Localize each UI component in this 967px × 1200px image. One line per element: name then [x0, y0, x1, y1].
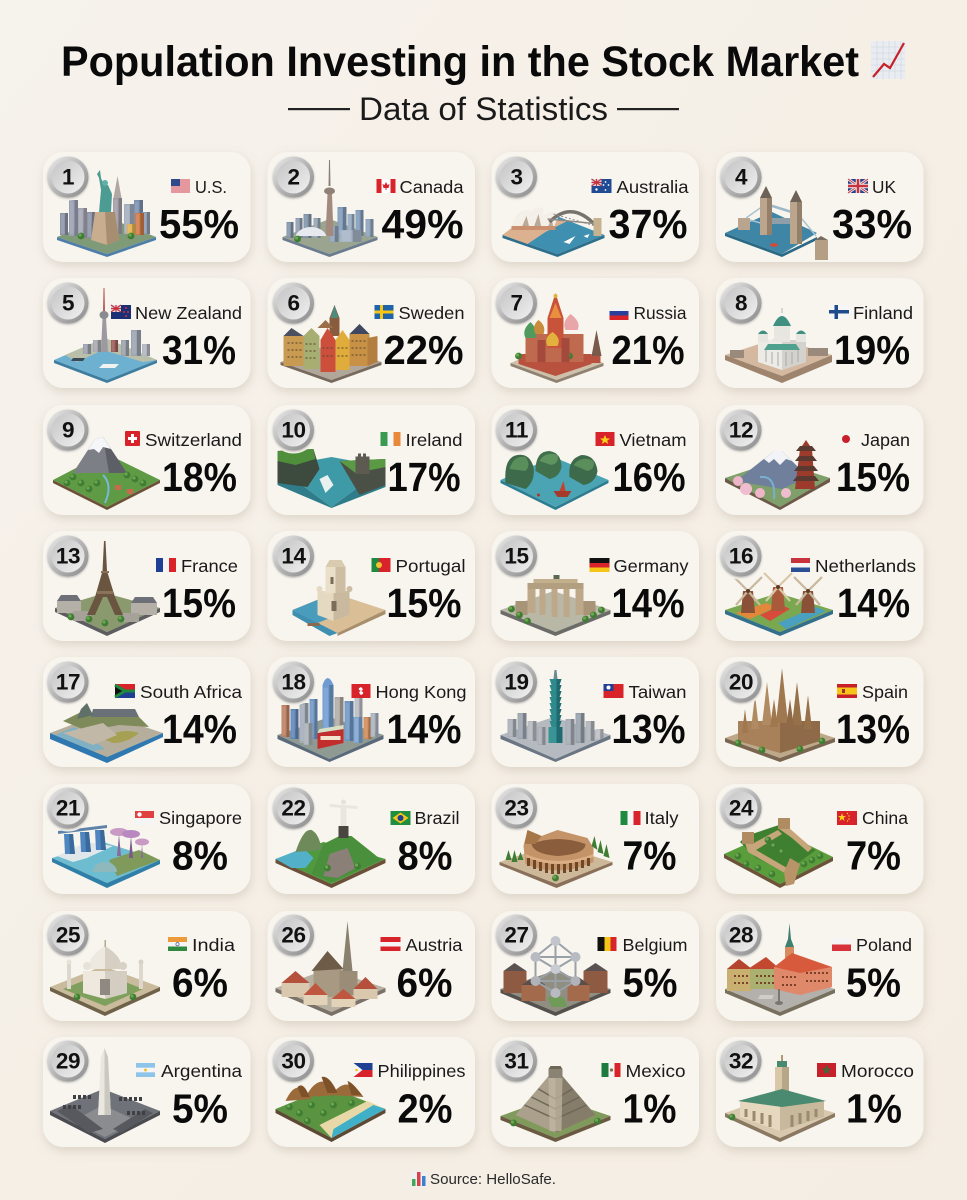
rank badge: 18 [281, 670, 306, 694]
country name: Canada [400, 177, 464, 197]
rank badge: 22 [281, 796, 306, 820]
rank badge [718, 532, 764, 580]
illustration: Hong Kong skyline [278, 678, 384, 762]
card 6: Sweden [268, 278, 475, 388]
rank badge: 17 [56, 670, 80, 694]
card 21: Singapore [43, 784, 250, 894]
illustration: Tower Bridge [725, 186, 828, 260]
percentage: 14% [612, 580, 684, 626]
rank badge: 6 [287, 290, 300, 316]
rank badge: 30 [281, 1048, 306, 1074]
flag: New Zealand [111, 305, 131, 319]
rank badge [718, 154, 764, 200]
flag: Finland [829, 305, 849, 319]
card 3: Australia [492, 152, 699, 262]
card 19: Taiwan [492, 657, 699, 767]
rank badge: 32 [729, 1048, 753, 1074]
percentage: 15% [386, 580, 462, 626]
illustration: Sagrada Familia [725, 668, 835, 762]
country name: Belgium [622, 935, 688, 955]
card 1: U.S. [43, 152, 250, 262]
card 20: Spain [716, 657, 924, 767]
rank badge: 5 [62, 290, 74, 316]
country name: Russia [634, 303, 687, 323]
illustration: Statue of Liberty and skyline [57, 170, 156, 257]
percentage: 21% [612, 327, 684, 373]
flag: Poland [832, 938, 851, 951]
flag: France [156, 558, 176, 572]
flag: Argentina [136, 1063, 155, 1077]
flag: Brazil [390, 811, 410, 825]
rank badge: 4 [735, 164, 748, 190]
country name: Hong Kong [376, 682, 466, 702]
rank badge [44, 406, 92, 454]
card 15: Germany [492, 531, 699, 641]
illustration: Eiffel Tower [55, 541, 160, 636]
percentage: 16% [612, 454, 686, 500]
illustration: Windmills and tulip fields [725, 573, 833, 636]
card 16: Netherlands [716, 531, 924, 641]
country name: Portugal [396, 556, 466, 576]
flag: Taiwan [604, 684, 624, 698]
flag: Mexico [602, 1063, 620, 1077]
card 28: Poland [716, 911, 924, 1021]
rank badge [493, 658, 540, 706]
percentage: 15% [836, 454, 910, 500]
rank badge [718, 280, 764, 326]
flag: U.S. [171, 179, 190, 193]
rank badge: 27 [504, 922, 529, 948]
country name: Australia [616, 177, 689, 197]
country name: New Zealand [135, 303, 242, 323]
rank badge [718, 912, 764, 958]
percentage: 7% [622, 832, 676, 878]
rank badge [270, 280, 317, 326]
rank badge: 21 [56, 796, 80, 820]
flag: Germany [590, 558, 610, 572]
flag: Australia [592, 179, 612, 193]
card 27: Belgium [492, 911, 699, 1021]
rank badge [493, 406, 540, 454]
country name: Netherlands [815, 556, 916, 576]
illustration: Stockholm Gamla Stan buildings [280, 305, 382, 383]
illustration: Obelisco [50, 1048, 160, 1143]
rank badge [270, 912, 317, 958]
card 12: Japan [716, 405, 924, 515]
rank badge: 24 [729, 796, 754, 820]
rank badge [270, 784, 317, 832]
rank badge: 9 [62, 418, 74, 442]
rank badge [493, 532, 540, 580]
rank badge [718, 658, 764, 706]
flag: Switzerland [125, 431, 140, 446]
flag: China [837, 811, 857, 825]
illustration: Marina Bay Sands and Supertrees [52, 825, 160, 888]
rank badge [270, 532, 317, 580]
rank badge: 7 [510, 290, 523, 316]
card 2: Canada [268, 152, 475, 262]
country name: France [181, 556, 238, 576]
country name: Mexico [626, 1061, 686, 1081]
card 22: Brazil [268, 784, 475, 894]
card 8: Finland [716, 278, 924, 388]
flag: Belgium [598, 937, 616, 951]
percentage: 19% [834, 327, 910, 373]
flag: Canada [376, 179, 396, 193]
rank badge: 10 [281, 418, 306, 442]
illustration: Mount Fuji and pagoda [725, 440, 830, 510]
illustration: Sydney Opera House and bridge [502, 207, 604, 257]
rank badge [44, 1038, 92, 1084]
rank badge [718, 784, 764, 832]
country name: Finland [853, 303, 913, 323]
card 5: New Zealand [43, 278, 250, 388]
percentage: 15% [162, 580, 236, 626]
flag: Sweden [374, 305, 394, 319]
country name: Austria [406, 935, 463, 955]
percentage: 7% [846, 832, 901, 878]
source note: Source: HelloSafe. [430, 1171, 556, 1188]
rank badge: 29 [56, 1048, 80, 1074]
card 30: Philippines [268, 1037, 475, 1147]
country name: Italy [644, 808, 679, 828]
card 18: Hong Kong [268, 657, 475, 767]
illustration: CN Tower and skyline [282, 160, 378, 257]
illustration: Cliffs of Moher [278, 449, 386, 508]
flag: Vietnam [596, 432, 614, 446]
percentage: 5% [172, 1086, 228, 1132]
rank badge: 31 [504, 1048, 529, 1074]
flag: Austria [380, 937, 400, 951]
illustration: Great Wall [724, 818, 833, 888]
percentage: 14% [386, 706, 462, 752]
rank badge [493, 912, 540, 958]
title: Population Investing in the Stock Market [61, 38, 859, 86]
rank badge [44, 784, 92, 832]
rank badge: 26 [281, 922, 306, 948]
rank badge [493, 784, 540, 832]
card 31: Mexico [492, 1037, 699, 1147]
country name: Morocco [841, 1061, 914, 1081]
illustration: Belem Tower [292, 560, 386, 636]
flag: Philippines [354, 1063, 372, 1077]
country name: UK [872, 177, 896, 197]
rank badge: 13 [56, 544, 80, 568]
flag: Ireland [380, 432, 400, 446]
illustration: Hassan II Mosque [725, 1055, 835, 1142]
illustration: Saint Basil's Cathedral [510, 293, 604, 383]
illustration: Chichen Itza pyramid [500, 1066, 610, 1142]
flag: India [168, 937, 187, 951]
card 17: South Africa [43, 657, 250, 767]
rank badge: 15 [504, 544, 529, 568]
flag: South Africa [115, 684, 135, 698]
percentage: 31% [162, 327, 236, 373]
flag: Morocco [817, 1063, 836, 1077]
illustration: Taj Mahal [50, 940, 160, 1016]
rank badge: 8 [735, 290, 747, 316]
flag: UK [848, 179, 868, 193]
rank badge: 2 [287, 164, 300, 190]
illustration: Matterhorn [53, 437, 160, 510]
country name: Germany [614, 556, 689, 576]
subtitle with rules: Data of Statistics [359, 91, 608, 127]
percentage: 1% [846, 1086, 902, 1132]
percentage: 2% [398, 1086, 452, 1132]
illustration: Ha Long Bay [500, 451, 608, 510]
rank badge: 25 [56, 922, 80, 948]
rank badge: 3 [510, 164, 523, 190]
illustration: St. Stephen's Cathedral [276, 921, 386, 1016]
rank badge [270, 406, 317, 454]
percentage: 5% [846, 960, 901, 1006]
rank badge [718, 406, 764, 454]
flag: Italy [620, 811, 640, 825]
country name: U.S. [195, 177, 227, 197]
country name: Singapore [159, 808, 242, 828]
card 14: Portugal [268, 531, 475, 641]
rank badge [493, 280, 540, 326]
rank badge: 14 [281, 544, 306, 568]
percentage: 22% [384, 327, 464, 373]
card 7: Russia [492, 278, 699, 388]
percentage: 6% [396, 960, 452, 1006]
illustration: Table Mountain [50, 703, 163, 763]
card 10: Ireland [268, 405, 475, 515]
illustration: Warsaw Old Town [725, 923, 835, 1016]
flag: Netherlands [791, 558, 810, 572]
percentage: 5% [622, 960, 678, 1006]
rank badge [270, 1038, 317, 1084]
rank badge [44, 280, 92, 326]
percentage: 14% [837, 580, 910, 626]
country name: Argentina [161, 1061, 242, 1081]
illustration: Brandenburg Gate [500, 575, 610, 636]
country name: Spain [862, 682, 908, 702]
illustration: Christ the Redeemer [276, 800, 386, 888]
percentage: 49% [382, 201, 464, 247]
rank badge: 12 [729, 418, 753, 442]
rank badge [718, 1038, 764, 1084]
percentage: 6% [172, 960, 228, 1006]
rank badge [493, 1038, 540, 1084]
rank badge: 11 [505, 418, 528, 442]
illustration: Sky Tower and harbour [54, 288, 157, 383]
country name: South Africa [140, 682, 242, 702]
card 23: Italy [492, 784, 699, 894]
rank badge [270, 154, 317, 200]
country name: Ireland [406, 430, 462, 450]
percentage: 13% [612, 706, 686, 752]
country name: China [862, 808, 908, 828]
flag: Russia [610, 307, 628, 320]
card 11: Vietnam [492, 405, 699, 515]
illustration: Helsinki Cathedral [725, 308, 832, 383]
rank badge [270, 658, 317, 706]
flag: Portugal [372, 558, 390, 572]
rank badge [44, 912, 92, 958]
rank badge [44, 154, 92, 200]
country name: Sweden [398, 303, 464, 323]
rank badge: 16 [729, 544, 753, 568]
illustration: Atomium [500, 936, 610, 1016]
icon: bar chart emoji [411, 1171, 426, 1187]
card 32: Morocco [716, 1037, 924, 1147]
percentage: 8% [398, 832, 452, 878]
percentage: 18% [162, 454, 237, 500]
card 9: Switzerland [43, 405, 250, 515]
percentage: 8% [172, 832, 228, 878]
rank badge: 1 [62, 164, 74, 190]
illustration: Taipei 101 [500, 670, 610, 762]
card 25: India [43, 911, 250, 1021]
rank badge [44, 532, 92, 580]
country name: Brazil [414, 808, 460, 828]
country name: Taiwan [628, 682, 686, 702]
rank badge: 28 [729, 922, 753, 948]
rank badge: 23 [504, 796, 529, 820]
illustration: Colosseum [500, 830, 612, 888]
country name: Philippines [378, 1061, 466, 1081]
card 26: Austria [268, 911, 475, 1021]
country name: Poland [856, 935, 912, 955]
country name: Vietnam [620, 430, 686, 450]
flag: Singapore [135, 811, 154, 825]
card 29: Argentina [43, 1037, 250, 1147]
percentage: 17% [388, 454, 460, 500]
rank badge [493, 154, 540, 200]
card 24: China [716, 784, 924, 894]
flag: Spain [837, 684, 857, 698]
percentage: 55% [159, 201, 239, 247]
flag: Hong Kong [352, 684, 370, 698]
country name: Japan [861, 430, 910, 450]
illustration: Chocolate Hills and beach [276, 1077, 386, 1142]
country name: India [192, 935, 235, 955]
icon: rising chart emoji [871, 41, 905, 79]
percentage: 14% [162, 706, 237, 752]
percentage: 33% [832, 201, 912, 247]
card 4: UK [716, 152, 924, 262]
flag: Japan [836, 432, 856, 446]
rank badge: 19 [504, 670, 529, 694]
percentage: 13% [836, 706, 910, 752]
card 13: France [43, 531, 250, 641]
rank badge [44, 658, 92, 706]
rank badge: 20 [729, 670, 753, 694]
country name: Switzerland [145, 430, 242, 450]
percentage: 1% [622, 1086, 676, 1132]
percentage: 37% [608, 201, 688, 247]
